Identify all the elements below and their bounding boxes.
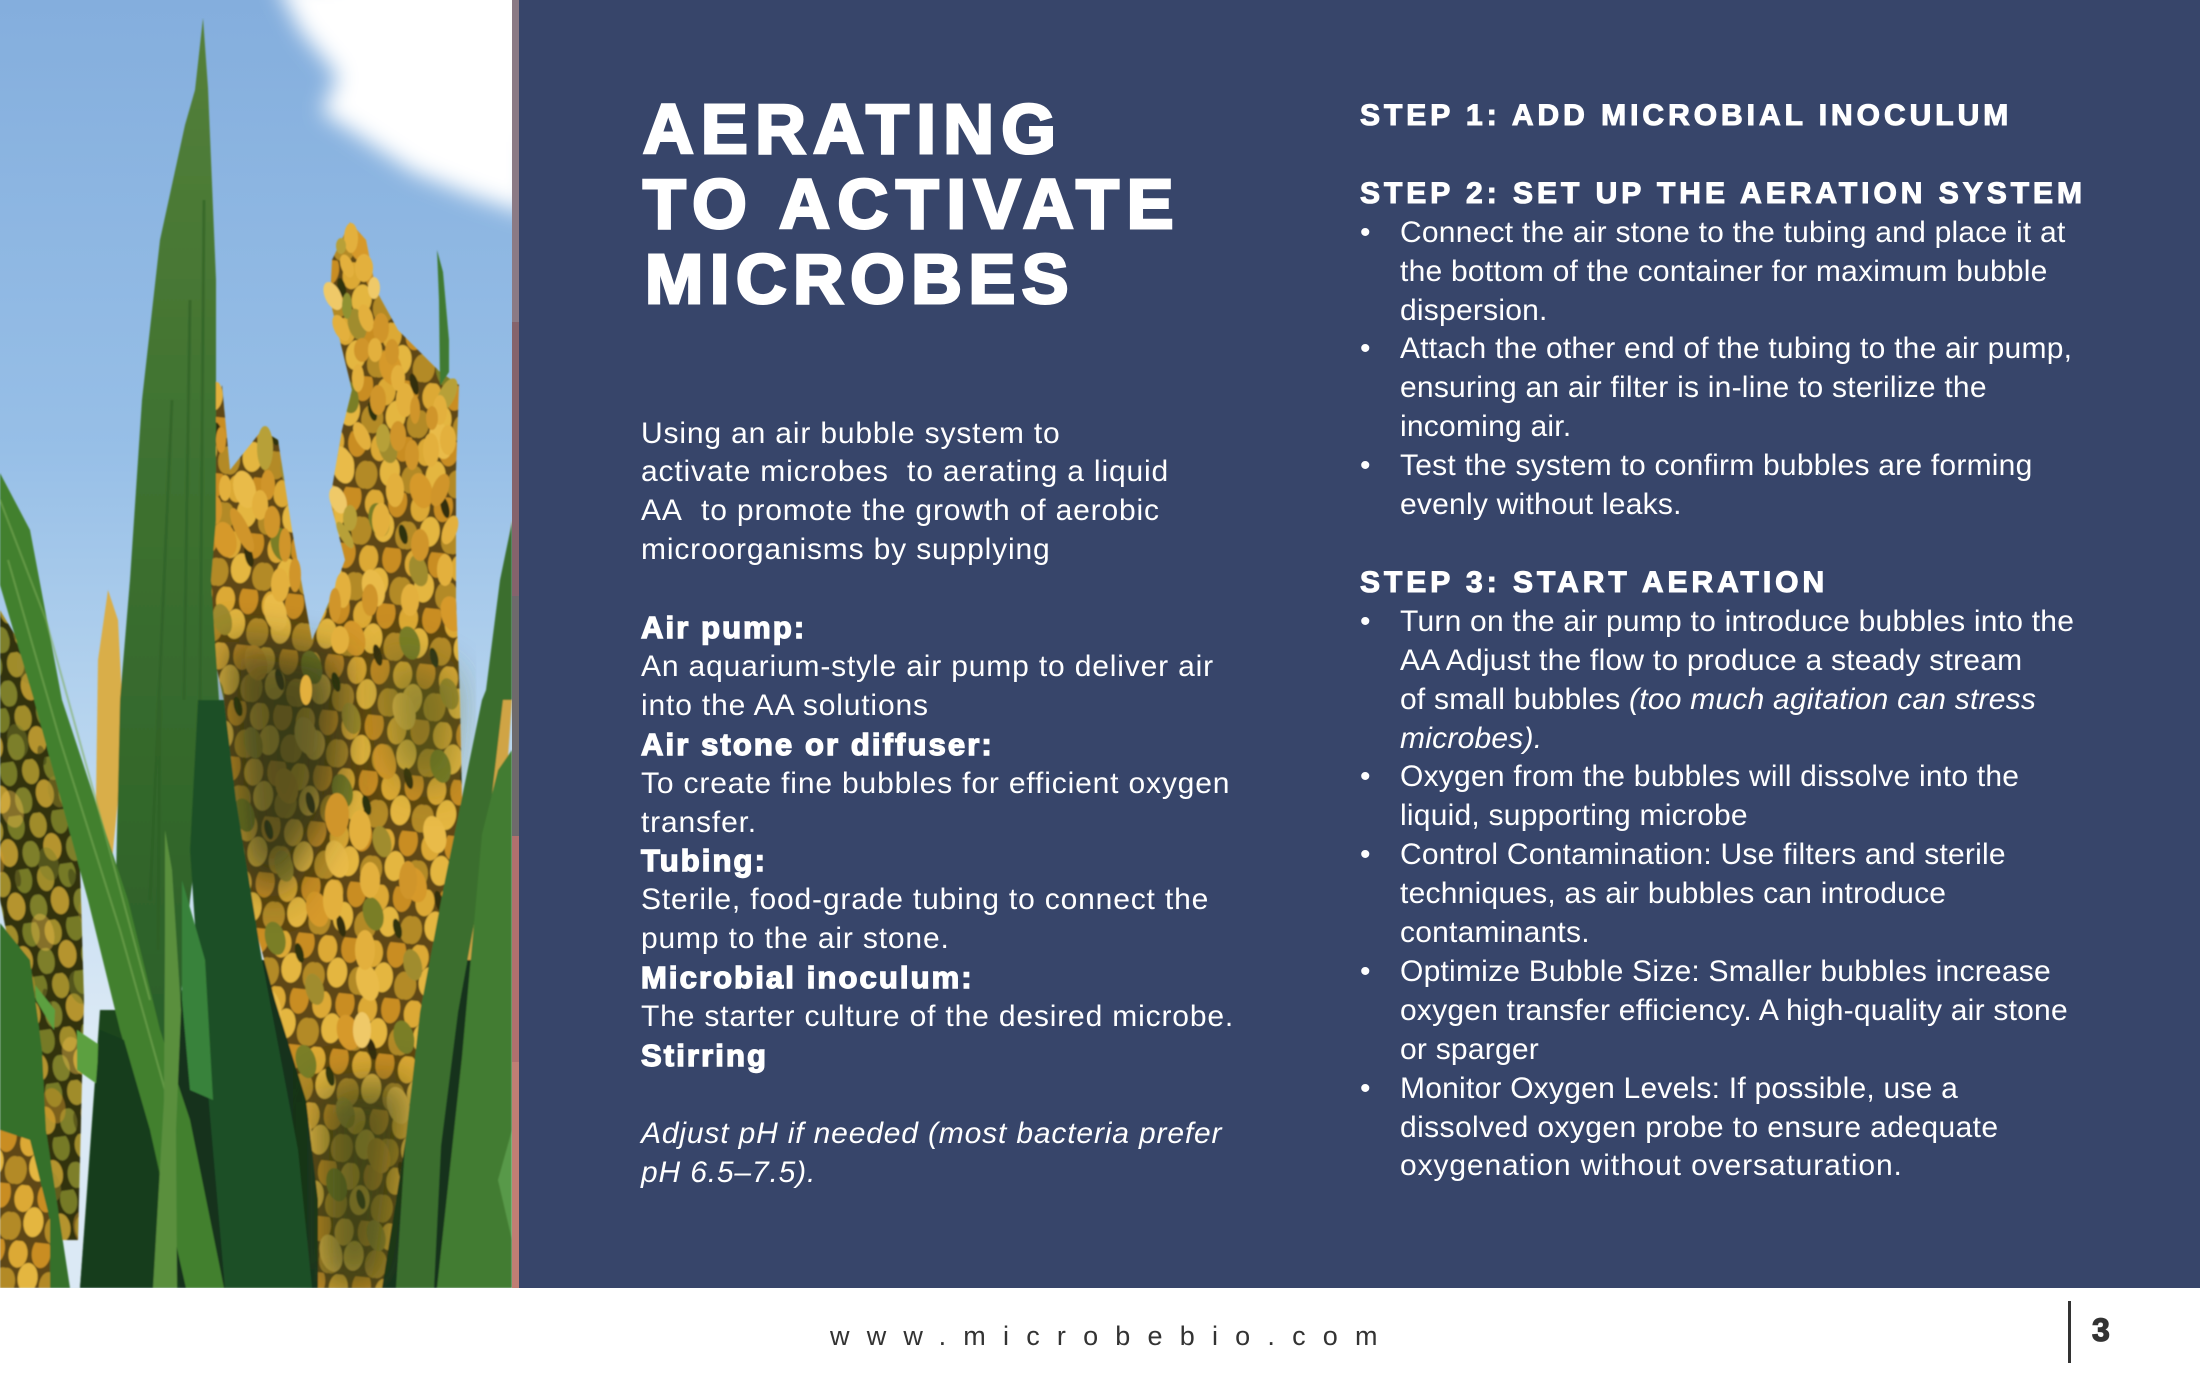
- left panicle: [0, 610, 84, 1240]
- text block: materials column: Microbial inoculum:: [641, 960, 974, 995]
- text block: materials column: microorganisms by supplying: [641, 533, 1051, 566]
- text block: steps column: dispersion.: [1400, 294, 1548, 327]
- text block: steps column: incoming air.: [1400, 410, 1571, 443]
- text block: steps column: STEP 2: SET UP THE AERATION SYSTEM: [1360, 177, 2086, 210]
- text block: materials column: activate microbes to aerating a liquid: [641, 455, 1169, 488]
- shadow base behind lower plants: [100, 960, 512, 1288]
- page number: 3: [2092, 1312, 2110, 1348]
- leaf: right outer: [396, 522, 512, 1288]
- leaf: diagonal left blade: [0, 473, 224, 1288]
- text block: steps column: liquid, supporting microbe: [1400, 799, 1748, 832]
- text block: steps column: Attach the other end of the tubing to the air pump,: [1400, 332, 2072, 365]
- individual grains: upper big panicle: [210, 223, 462, 1048]
- text block: steps column: or sparger: [1400, 1033, 1539, 1066]
- shading blobs on panicle: [225, 640, 345, 900]
- footer website url: www.microbebio.com: [830, 1321, 1395, 1351]
- text block: materials column: Air pump:: [641, 610, 806, 645]
- text block: materials column: Sterile, food-grade tubing to connect the: [641, 883, 1209, 916]
- panel: navy background: [519, 0, 2200, 1288]
- text block: steps column: Oxygen from the bubbles will dissolve into the: [1400, 760, 2019, 793]
- text block: steps column: oxygenation without oversaturation.: [1400, 1149, 1903, 1182]
- leaf: main tall blade: [116, 18, 219, 1060]
- text block: materials column: Air stone or diffuser:: [641, 727, 994, 762]
- bottom-left grain bunch: [0, 1130, 50, 1288]
- text block: materials column: To create fine bubbles for efficient oxygen: [641, 767, 1230, 800]
- text block: steps column: ensuring an air filter is in-line to sterilize the: [1400, 371, 1987, 404]
- text block: materials column: The starter culture of the desired microbe.: [641, 1000, 1234, 1033]
- text block: materials column: into the AA solutions: [641, 689, 929, 722]
- text block: steps column: microbes).: [1400, 722, 1542, 754]
- text block: steps column: STEP 3: START AERATION: [1360, 566, 1828, 599]
- text block: steps column: techniques, as air bubbles can introduce: [1400, 877, 1946, 910]
- text block: materials column: An aquarium-style air pump to deliver air: [641, 650, 1214, 683]
- title: MICROBES: [645, 240, 1075, 318]
- text block: steps column: Control Contamination: Use filters and sterile: [1400, 838, 2006, 871]
- title: AERATING: [643, 90, 1063, 168]
- text block: materials column: pump to the air stone.: [641, 922, 950, 955]
- title: [642, 90, 1181, 318]
- text block: materials column: transfer.: [641, 806, 757, 839]
- text block: steps column: AA Adjust the flow to produce a steady stream: [1400, 644, 2022, 677]
- far panicles: [96, 590, 122, 900]
- leaf: far left: [0, 923, 70, 1288]
- footer page divider: [2068, 1301, 2071, 1363]
- text block: steps column: of small bubbles (too much agitation can stress: [1400, 683, 2036, 716]
- text block: materials column: [640, 416, 1234, 1189]
- text block: steps column: contaminants.: [1400, 916, 1590, 949]
- text block: steps column: STEP 1: ADD MICROBIAL INOCULUM: [1360, 99, 2012, 132]
- text block: materials column: AA to promote the growth of aerobic: [641, 494, 1160, 527]
- photo: rice panicles against sky: [0, 0, 512, 1288]
- text block: materials column: Using an air bubble system to: [641, 416, 1061, 450]
- text block: steps column: Monitor Oxygen Levels: If possible, use a: [1400, 1072, 1958, 1105]
- text block: steps column: the bottom of the container for maximum bubble: [1400, 255, 2048, 288]
- title: TO ACTIVATE: [643, 165, 1181, 243]
- text block: steps column: [1360, 99, 2086, 1182]
- text block: materials column: Adjust pH if needed (most bacteria prefer: [641, 1117, 1222, 1150]
- text block: steps column: Test the system to confirm bubbles are forming: [1400, 449, 2033, 482]
- leaf: tip behind top right panicle: [437, 250, 449, 386]
- text block: steps column: dissolved oxygen probe to ensure adequate: [1400, 1111, 1998, 1144]
- text block: steps column: Optimize Bubble Size: Smaller bubbles increase: [1400, 955, 2051, 988]
- side strip: colour blocks: [512, 0, 519, 1288]
- text block: materials column: Tubing:: [641, 843, 767, 878]
- text block: steps column: evenly without leaks.: [1400, 488, 1682, 521]
- leaf: thin central blade: [153, 830, 181, 1288]
- text block: materials column: Stirring: [641, 1038, 768, 1073]
- text block: materials column: pH 6.5–7.5).: [641, 1156, 816, 1189]
- text block: steps column: Turn on the air pump to introduce bubbles into the: [1400, 605, 2074, 638]
- text block: steps column: oxygen transfer efficiency. A high-quality air stone: [1400, 994, 2068, 1027]
- big central panicle mass: [210, 222, 462, 1288]
- text block: steps column: Connect the air stone to the tubing and place it at: [1400, 216, 2066, 249]
